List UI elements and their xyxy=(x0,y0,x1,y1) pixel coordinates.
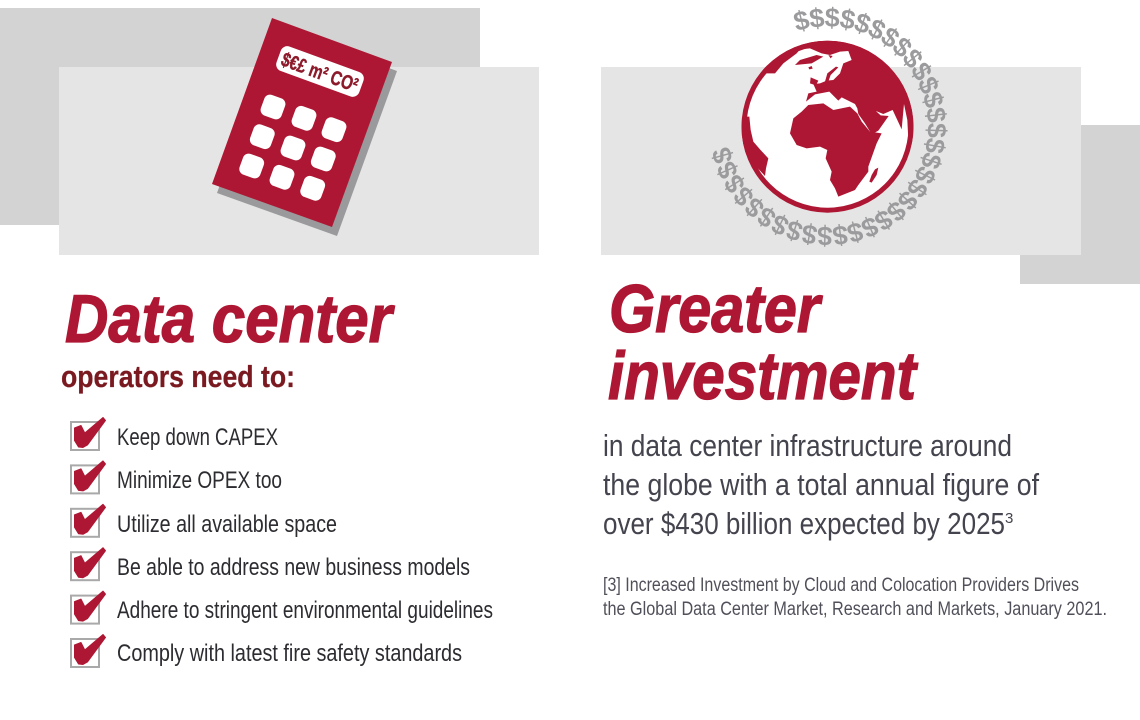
item: keep down CAPEX: Keep down CAPEX xyxy=(117,424,278,451)
item: environmental guidelines: Adhere to stringent environmental guidelines xyxy=(117,597,493,624)
icon: globe xyxy=(742,40,914,213)
text block: investment figure: 3 xyxy=(1005,510,1013,527)
item: minimize OPEX xyxy=(71,461,282,494)
panel: left background xyxy=(0,8,539,255)
text block: investment figure: over $430 billion expected by 2025 xyxy=(603,506,1005,541)
item: utilize space: Utilize all available space xyxy=(117,511,337,538)
icon: calculator: $€£ m² CO² xyxy=(278,49,361,97)
subheading: operators need to: operators need to: xyxy=(61,359,295,394)
heading: Greater investment: Greater xyxy=(609,271,823,347)
item: new business models: Be able to address new business models xyxy=(117,554,470,581)
text block: footnote xyxy=(603,575,1107,620)
text block: investment figure xyxy=(603,428,1039,541)
item: new business models xyxy=(71,548,470,581)
checklist xyxy=(71,418,493,667)
item: utilize space xyxy=(71,504,337,538)
icon: calculator xyxy=(212,18,397,236)
panel: right background xyxy=(601,67,1140,284)
heading: Data center: Data center xyxy=(65,281,395,357)
item: keep down CAPEX xyxy=(71,418,278,451)
item: fire safety standards: Comply with latest fire safety standards xyxy=(117,640,462,667)
heading: Greater investment xyxy=(608,271,918,414)
item: minimize OPEX: Minimize OPEX too xyxy=(117,467,282,494)
text block: investment figure: in data center infrastructure around xyxy=(603,428,1012,463)
item: environmental guidelines xyxy=(71,591,493,624)
icon: ring of dollar signs: $$$$$$$$$$$$$$$$$$$$$$$$$$$$$$$$$$ xyxy=(712,6,948,247)
text block: investment figure: the globe with a total annual figure of xyxy=(603,467,1039,502)
heading: Greater investment: investment xyxy=(608,338,918,414)
item: fire safety standards xyxy=(71,634,462,667)
